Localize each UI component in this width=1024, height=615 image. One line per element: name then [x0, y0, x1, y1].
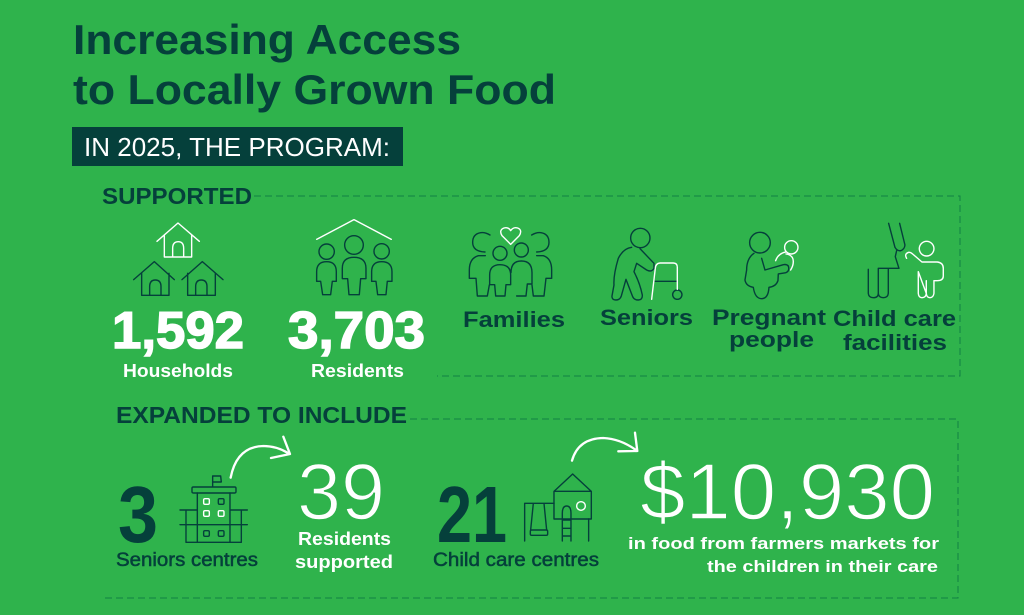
- label: seniors: Seniors: [600, 305, 693, 330]
- stat: residents: 3,703: [288, 302, 425, 360]
- icon: playground: [525, 474, 591, 541]
- heading: supported: SUPPORTED: [102, 183, 252, 209]
- label: pregnant people: people: [729, 327, 814, 352]
- label: pregnant people: Pregnant: [712, 305, 827, 330]
- label: child care facilities: facilities: [843, 330, 947, 355]
- stat: child care centres: Child care centres: [433, 550, 599, 571]
- label: pregnant people: [712, 305, 827, 352]
- stat: seniors centres: 3: [118, 470, 158, 559]
- label: child care facilities: Child care: [833, 306, 956, 331]
- stat: residents supported: 39: [297, 447, 385, 536]
- stat: food dollars: $10,930: [640, 447, 935, 536]
- title: [73, 16, 556, 113]
- stat: households: 1,592: [112, 302, 244, 360]
- icon: pregnant person: [745, 232, 798, 299]
- stat: child care centres: [433, 470, 599, 571]
- icon: families: [469, 228, 552, 296]
- title: Increasing Access: [73, 16, 461, 63]
- stat: child care centres: 21: [437, 470, 507, 559]
- stat: households: Households: [123, 361, 233, 381]
- title: to Locally Grown Food: [73, 66, 556, 113]
- stat: residents: Residents: [311, 361, 404, 381]
- subtitle banner: IN 2025, THE PROGRAM:: [84, 132, 390, 162]
- stat: food dollars: in food from farmers markets for: [628, 534, 939, 553]
- arrow: child care to food dollars: [572, 433, 637, 461]
- label: child care facilities: [833, 306, 956, 355]
- stat: food dollars: the children in their care: [707, 557, 938, 576]
- stat: residents supported: Residents: [298, 529, 391, 549]
- arrow: seniors to residents: [231, 437, 290, 478]
- stat: seniors centres: [116, 470, 258, 571]
- icon: senior with walker: [612, 228, 682, 300]
- stat: residents supported: [295, 447, 393, 572]
- icon: houses: [134, 223, 223, 295]
- stat: residents supported: supported: [295, 552, 393, 572]
- heading: expanded to include: EXPANDED TO INCLUDE: [116, 402, 407, 428]
- stat: residents: [288, 302, 425, 381]
- label: families: Families: [463, 307, 565, 332]
- stat: seniors centres: Seniors centres: [116, 550, 258, 571]
- icon: residents under roof: [317, 220, 392, 295]
- icon: seniors centre building: [180, 476, 247, 542]
- icon: adult and child: [868, 223, 943, 298]
- stat: food dollars: [628, 447, 939, 576]
